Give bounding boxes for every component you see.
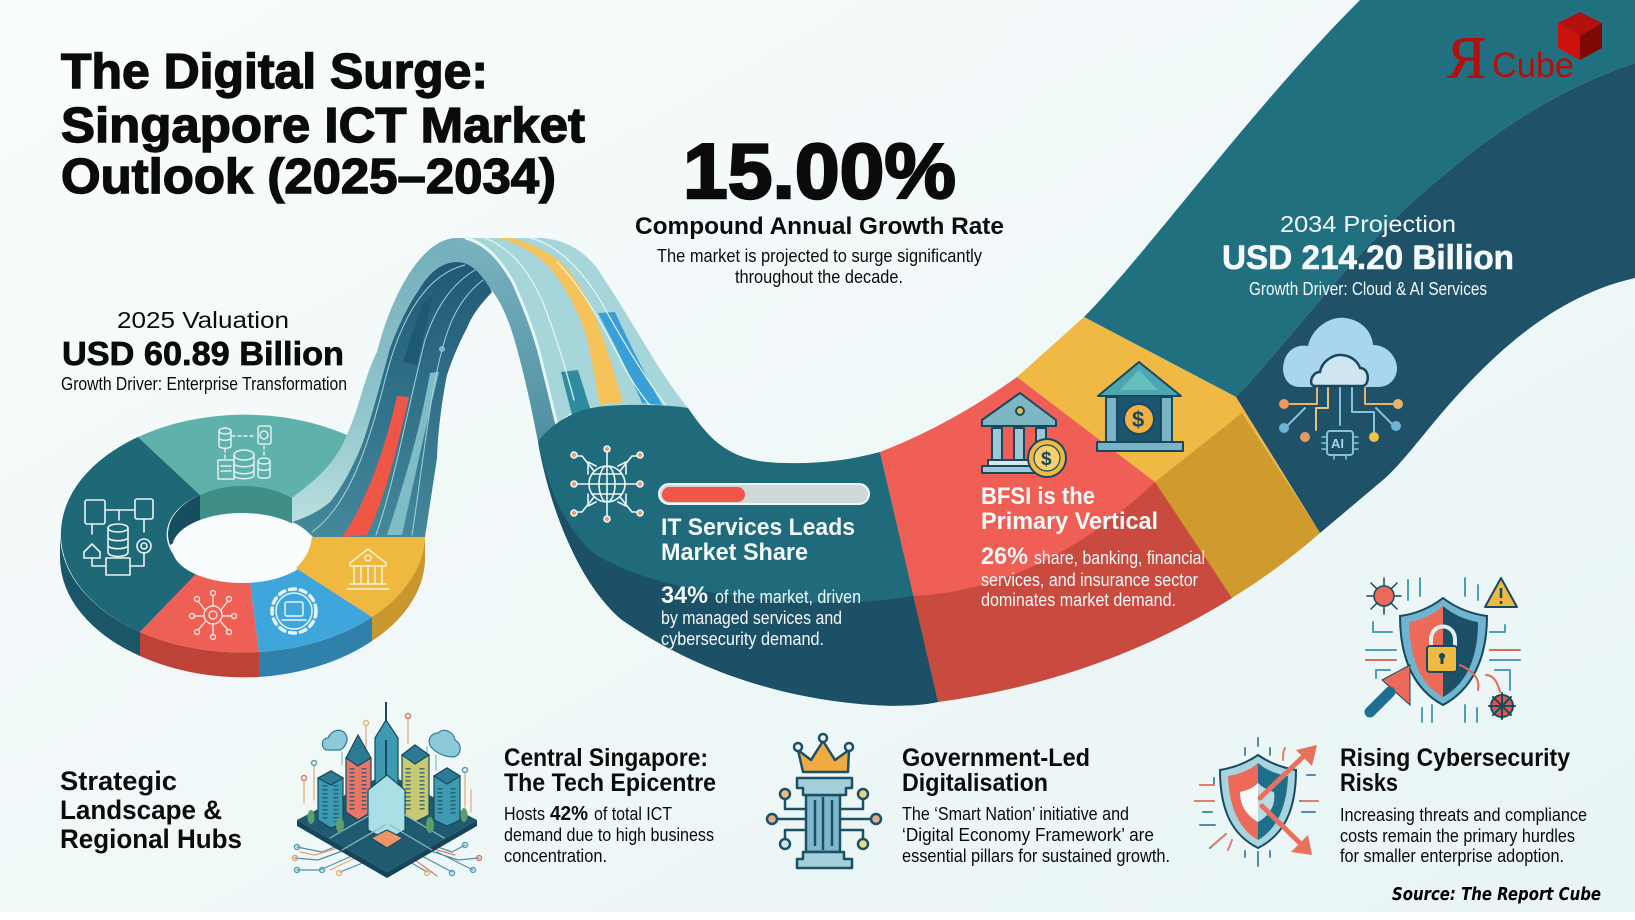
pillar capital bbox=[797, 778, 852, 795]
text: cybersecurity: for smaller enterprise adoption. bbox=[1340, 846, 1564, 866]
text: government: ‘Digital Economy Framework’ are bbox=[902, 825, 1154, 845]
arrow up bbox=[1260, 752, 1308, 798]
donut chart base bbox=[60, 415, 425, 677]
2025 valuation: 2025 Valuation bbox=[117, 307, 289, 333]
ribbon: yellow stripe bbox=[498, 238, 623, 405]
ribbon arc rising from donut bbox=[292, 238, 688, 537]
icon: bank with coin: $ bbox=[1041, 449, 1052, 470]
swoosh: dark red shade bbox=[913, 482, 1232, 702]
CAGR description bbox=[657, 246, 982, 287]
towers bbox=[318, 702, 460, 848]
logo: wordmark bbox=[1447, 25, 1574, 91]
panel: IT services swoosh segment bbox=[538, 405, 938, 706]
CAGR headline block bbox=[635, 127, 1004, 287]
swoosh: dark yellow shade bbox=[1155, 413, 1320, 598]
donut: hole bbox=[172, 513, 312, 583]
icon: red hub bbox=[190, 590, 236, 640]
ribbon: teal short stripe bbox=[561, 370, 590, 415]
pillar base bbox=[797, 852, 852, 868]
ribbon: underside streak lines bbox=[312, 265, 483, 535]
trees bbox=[308, 808, 468, 833]
icon: cloud AI bbox=[1279, 318, 1403, 459]
logo: wordmark: Я bbox=[1447, 25, 1486, 91]
text: BFSI: Primary Vertical bbox=[981, 508, 1158, 535]
CAGR label: Compound Annual Growth Rate bbox=[635, 213, 1004, 240]
title bbox=[61, 45, 585, 204]
ribbon: teal descending band bbox=[457, 238, 557, 442]
text: central singapore: concentration. bbox=[504, 846, 607, 866]
text: cybersecurity: Rising Cybersecurity bbox=[1340, 744, 1570, 772]
swoosh: yellow segment bbox=[1017, 317, 1320, 598]
icon: bank with dollar: $ bbox=[1132, 407, 1144, 432]
text: cybersecurity: costs remain the primary hurdles bbox=[1340, 826, 1575, 846]
2034 projection: 2034 Projection bbox=[1280, 211, 1456, 237]
warning sign bbox=[1485, 578, 1517, 607]
ribbon: white lines bbox=[466, 238, 557, 425]
text: central singapore: Central Singapore: bbox=[504, 744, 708, 772]
text: BFSI: dominates market demand. bbox=[981, 590, 1176, 610]
ribbon: underside bbox=[292, 262, 492, 537]
icon: yellow bank bbox=[347, 549, 389, 589]
radiating lines bbox=[1195, 738, 1318, 866]
ribbon: light descending face bbox=[466, 238, 688, 425]
CAGR description: throughout the decade. bbox=[735, 267, 903, 287]
pillar shaft bbox=[806, 795, 840, 852]
icon: bank with coin bbox=[982, 393, 1066, 477]
text: BFSI: share, banking, financial bbox=[1034, 548, 1205, 568]
text: IT services: of the market, driven bbox=[715, 587, 861, 607]
text: government bbox=[902, 744, 1170, 866]
icon: crowned pillar bbox=[767, 734, 881, 868]
icon: globe network bbox=[571, 446, 643, 522]
text: IT services: by managed services and bbox=[661, 608, 842, 628]
growth swoosh band bbox=[880, 0, 1635, 702]
title: The Digital Surge: bbox=[61, 45, 488, 99]
donut: dark teal segment bbox=[61, 437, 200, 632]
swoosh: upper teal bbox=[1084, 0, 1635, 397]
icon: databases bbox=[218, 426, 271, 479]
padlock bbox=[1431, 626, 1455, 648]
CAGR value: 15.00% bbox=[683, 127, 956, 215]
ribbon: underside light strip bbox=[387, 372, 439, 535]
crown bbox=[798, 741, 849, 772]
text: central singapore: demand due to high business bbox=[504, 825, 714, 845]
virus bottom bbox=[1489, 693, 1515, 719]
text: BFSI: 26% bbox=[981, 543, 1028, 570]
text: IT services: 34% bbox=[661, 582, 708, 609]
donut: red segment bbox=[140, 573, 259, 652]
text: BFSI: BFSI is the bbox=[981, 483, 1095, 510]
logo: wordmark: Cube bbox=[1492, 46, 1574, 85]
logo: cube bbox=[1558, 12, 1602, 60]
strategic landscape heading: Regional Hubs bbox=[60, 824, 242, 854]
magnifier arrow bbox=[1382, 665, 1410, 705]
2025 valuation: USD 60.89 Billion bbox=[62, 335, 344, 372]
2034 projection: USD 214.20 Billion bbox=[1222, 239, 1514, 277]
circuit nodes bbox=[292, 714, 482, 876]
donut: side walls bbox=[60, 534, 425, 677]
icon: blue gear bbox=[272, 589, 316, 633]
donut: light teal segment bbox=[138, 415, 347, 498]
text: IT services: IT Services Leads bbox=[661, 514, 855, 541]
donut: inner wall bbox=[200, 486, 292, 530]
crown tips bbox=[794, 734, 853, 751]
circuit nodes bbox=[1279, 399, 1403, 442]
ribbon: small node bbox=[439, 346, 445, 352]
AI chip: AI bbox=[1331, 436, 1344, 451]
icon: isometric city bbox=[292, 702, 482, 878]
text: government: The ‘Smart Nation’ initiative and bbox=[902, 804, 1129, 824]
icon: data network bbox=[84, 499, 153, 575]
icon: bank with dollar bbox=[1097, 362, 1183, 451]
circuit lines bbox=[1366, 578, 1520, 722]
text: cybersecurity bbox=[1340, 744, 1587, 866]
text: central singapore: The Tech Epicentre bbox=[504, 769, 716, 797]
2025 valuation bbox=[61, 307, 347, 394]
text: central singapore bbox=[504, 744, 716, 866]
text: cybersecurity: Risks bbox=[1340, 769, 1398, 797]
AI chip bbox=[1322, 431, 1358, 459]
circuit branches bbox=[776, 799, 872, 839]
text: IT services: Market Share bbox=[661, 539, 808, 566]
ribbon: red stripe bbox=[342, 396, 409, 537]
2034 projection bbox=[1222, 211, 1514, 299]
virus top bbox=[1367, 578, 1401, 614]
text: central singapore: of total ICT bbox=[594, 804, 672, 824]
shield body bbox=[1400, 598, 1487, 705]
tower windows bbox=[325, 768, 453, 822]
text: government: Digitalisation bbox=[902, 769, 1048, 797]
city base bbox=[297, 773, 477, 872]
road lines bbox=[330, 815, 444, 850]
icon: shield with lock bbox=[1366, 578, 1520, 722]
text: IT services: cybersecurity demand. bbox=[661, 629, 824, 649]
text: IT services bbox=[661, 514, 861, 649]
title: Outlook (2025–2034) bbox=[61, 150, 556, 204]
text: government: essential pillars for sustained growth. bbox=[902, 846, 1170, 866]
circuit nodes bbox=[767, 789, 881, 849]
2025 valuation: Growth Driver: Enterprise Transformation bbox=[61, 374, 347, 394]
circuit traces bbox=[295, 718, 479, 876]
CAGR description: The market is projected to surge significantly bbox=[657, 246, 982, 266]
clouds bbox=[322, 730, 460, 757]
icon: shield with arrows bbox=[1195, 738, 1318, 866]
swoosh: dark teal end bbox=[1236, 63, 1635, 533]
progress bar bbox=[659, 484, 869, 504]
segment: teal base bbox=[538, 405, 938, 706]
ribbon: underside dark block bbox=[403, 296, 433, 365]
strategic landscape heading: Landscape & bbox=[60, 795, 222, 825]
text: central singapore: Hosts bbox=[504, 804, 545, 824]
arrow down bbox=[1262, 806, 1305, 848]
ribbon: blue stripe bbox=[598, 312, 662, 405]
2034 projection: Growth Driver: Cloud & AI Services bbox=[1249, 279, 1487, 299]
shield bbox=[1220, 755, 1296, 848]
text: cybersecurity: Increasing threats and compliance bbox=[1340, 805, 1587, 825]
text: central singapore: 42% bbox=[550, 803, 588, 825]
ribbon: left frame bbox=[292, 238, 490, 522]
cloud bbox=[1283, 318, 1397, 387]
text: BFSI: services, and insurance sector bbox=[981, 570, 1198, 590]
circuit lines bbox=[1288, 388, 1393, 432]
title: Singapore ICT Market bbox=[61, 99, 585, 153]
strategic landscape heading bbox=[60, 766, 242, 854]
logo bbox=[1447, 12, 1602, 91]
text: BFSI bbox=[981, 483, 1205, 610]
donut: blue segment bbox=[250, 568, 372, 652]
swoosh: red segment bbox=[880, 377, 1232, 702]
donut: yellow segment bbox=[296, 537, 425, 617]
text: government: Government-Led bbox=[902, 744, 1090, 772]
strategic landscape heading: Strategic bbox=[60, 766, 177, 796]
segment: dark teal shade bbox=[538, 442, 938, 706]
